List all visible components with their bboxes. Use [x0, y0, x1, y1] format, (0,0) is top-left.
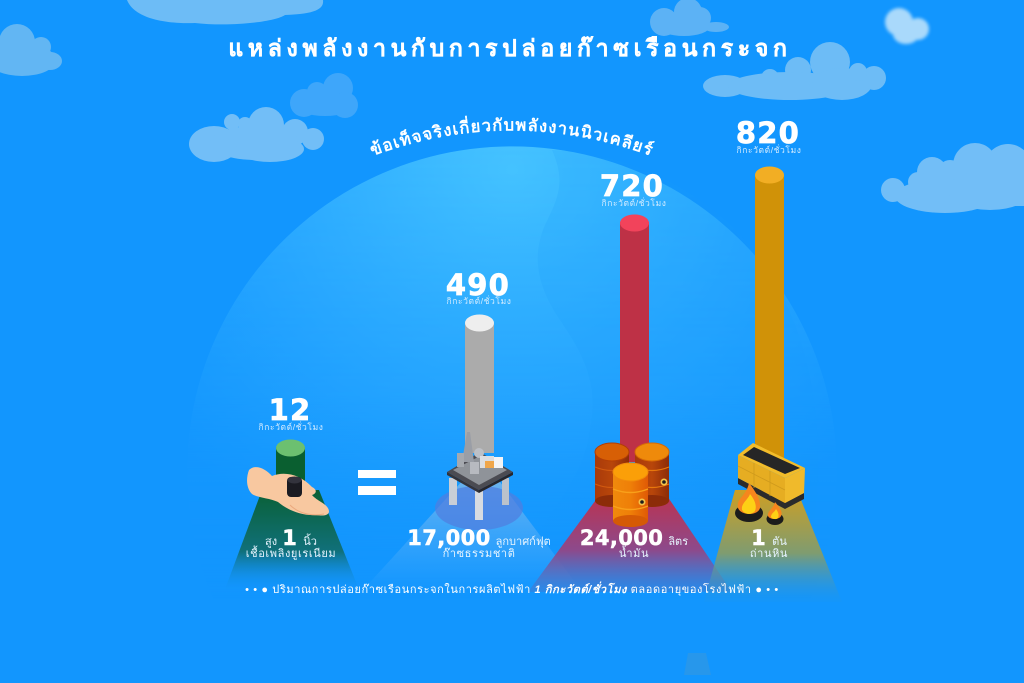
cylinder: gold: [755, 166, 784, 465]
cloud: top centre right: [650, 0, 729, 36]
cloud: middle left: [189, 107, 324, 162]
cloud: left: [0, 24, 62, 76]
cylinder: green: [276, 440, 305, 502]
value: 490: 490: [446, 268, 510, 302]
unit: กิกะวัตต์/ชั่วโมง: [601, 197, 667, 208]
cloud: top left centre: [127, 0, 323, 24]
label: 17,000: 17,000 ลูกบาศก์ฟุต: [407, 526, 551, 550]
icon: oil barrels: [595, 443, 669, 527]
label: 1 ton: 1 ตัน: [751, 526, 787, 550]
title: แหล่งพลังงานกับการปล่อยก๊าซเรือนกระจก: [228, 35, 792, 61]
cylinder: red: [620, 214, 649, 462]
column: coal: [704, 116, 842, 602]
label: coal: ถ่านหิน: [750, 548, 788, 560]
beam: red: [528, 478, 732, 592]
column: natural gas: [363, 268, 581, 590]
value: 720: 720: [600, 169, 664, 203]
platform shadow: [435, 486, 523, 530]
globe: [210, 146, 814, 466]
beam: gold: [704, 490, 842, 602]
label: 24,000: 24,000 ลิตร: [580, 526, 688, 550]
label: oil: น้ำมัน: [619, 545, 649, 560]
unit: กิกะวัตต์/ชั่วโมง: [258, 421, 324, 432]
column: oil: [528, 169, 732, 592]
icon: offshore platform: [447, 432, 513, 520]
curved subtitle: ข้อเท็จจริงเกี่ยวกับพลังงานนิวเคลียร์: [370, 116, 655, 155]
cloud: top right: [703, 42, 886, 100]
unit: กิกะวัตต์/ชั่วโมง: [736, 144, 802, 155]
beam: gray: [363, 478, 581, 590]
value: 820: 820: [736, 116, 800, 150]
value: 12: 12: [269, 393, 311, 427]
cloud: small bright top right: [885, 8, 929, 44]
icon: coal cart and fire: [735, 443, 805, 525]
unit: กิกะวัตต์/ชั่วโมง: [446, 295, 512, 306]
faint spot: bottom: [684, 653, 711, 675]
cylinder: gray: [465, 314, 494, 453]
cloud: middle dark: [290, 73, 358, 118]
cloud: right: [881, 143, 1024, 213]
column: uranium: [224, 393, 360, 592]
beam: green: [224, 490, 360, 592]
label: 1 inch: สูง 1 นิ้ว: [265, 526, 317, 550]
equals sign: [358, 470, 396, 495]
label: uranium fuel: เชื้อเพลิงยูเรเนียม: [246, 545, 336, 560]
footnote: • • ● ปริมาณการปล่อยก๊าซเรือนกระจกในการผลิตไฟฟ้า 1 กิกะวัตต์/ชั่วโมง ตลอดอายุของโรงไฟฟ้า ● • •: [245, 581, 779, 596]
label: natural gas: ก๊าซธรรมชาติ: [443, 547, 515, 560]
icon: hand holding pellet: [247, 467, 329, 516]
